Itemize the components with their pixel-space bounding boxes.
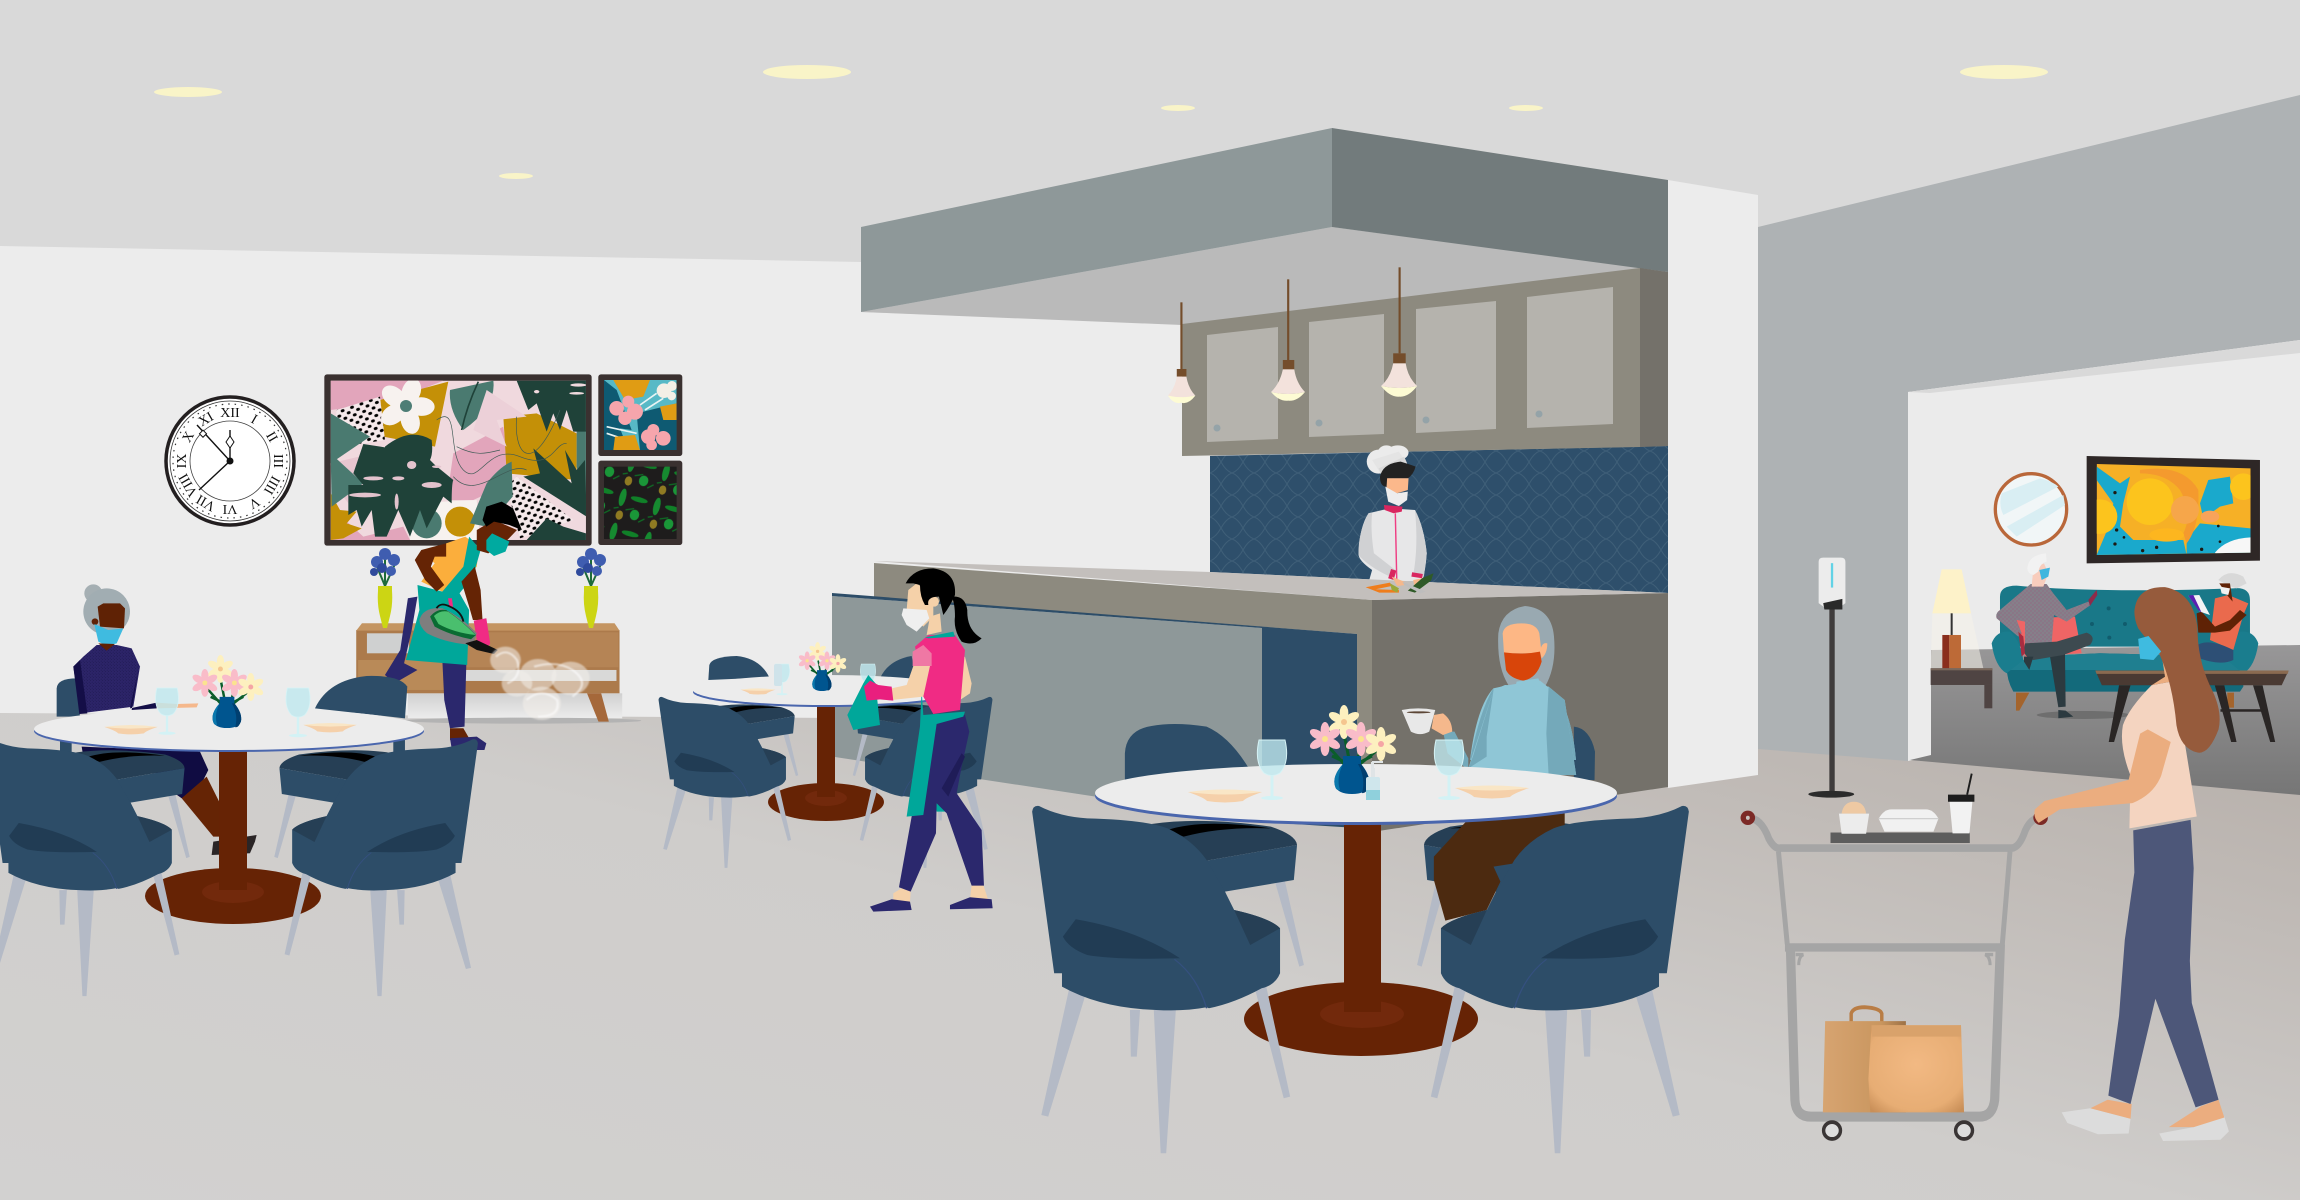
far chair backs	[57, 676, 407, 753]
seated woman reading	[2188, 573, 2248, 663]
sofa	[1992, 586, 2258, 711]
main table seating group	[1032, 606, 1689, 1153]
ceiling lights	[154, 65, 2048, 179]
far chair backs	[708, 656, 917, 680]
lounge floor	[1910, 645, 2300, 795]
service cart	[1741, 774, 2048, 1139]
clock numerals: IX	[175, 454, 190, 468]
left wall	[0, 246, 1210, 760]
clock numerals: XII	[220, 406, 240, 421]
near chair left	[0, 739, 190, 996]
clock numerals: VII	[194, 491, 218, 513]
hand sanitizer stand	[1808, 558, 1854, 798]
right white column	[1668, 180, 1758, 788]
near chair right	[274, 739, 478, 996]
ceiling	[0, 0, 2300, 400]
cleaner with steamer	[385, 502, 590, 750]
seated woman with coffee	[1402, 606, 1576, 921]
seated man	[1996, 553, 2130, 719]
clock numerals: XI	[196, 410, 217, 430]
far chair backs	[1125, 724, 1595, 780]
kitchen cabinets	[1182, 268, 1668, 456]
wall clock	[166, 397, 294, 525]
round table	[34, 708, 424, 924]
sideboard	[356, 623, 641, 724]
chef's chopping board vegetables	[1366, 573, 1434, 593]
clock numerals: II	[262, 429, 280, 445]
cart wheels	[1824, 1122, 1972, 1139]
steam cloud	[490, 647, 590, 720]
lounge coffee table	[2095, 670, 2289, 742]
clock numerals	[175, 406, 285, 516]
small floral painting	[598, 374, 682, 456]
table lamp	[1931, 569, 1983, 668]
clock numerals: V	[246, 493, 262, 511]
clock numerals: VI	[222, 501, 237, 516]
food tray	[1831, 774, 1974, 843]
cart frame	[1748, 818, 2041, 1117]
large tropical painting	[324, 374, 592, 546]
mirror	[1995, 474, 2067, 545]
middle table seating group	[659, 642, 992, 868]
sanitizer bottle	[1366, 762, 1383, 800]
round table	[1095, 764, 1617, 1056]
clock numerals: I	[248, 412, 260, 428]
small leaf painting	[598, 461, 682, 545]
round table	[693, 675, 959, 821]
yellow vases	[370, 548, 606, 628]
seated woman in blue mask	[73, 584, 257, 855]
clock numerals: IIII	[260, 473, 282, 497]
clock numerals: X	[180, 429, 198, 445]
side table	[1931, 668, 1992, 708]
left table seating group	[0, 584, 478, 996]
clock numerals: VIII	[176, 470, 201, 499]
lounge furniture and guests	[1931, 456, 2260, 719]
kitchen counter	[832, 563, 1668, 832]
pendant lights	[1168, 267, 1417, 403]
takeaway bags	[1823, 1007, 1964, 1112]
bulkhead over kitchen	[861, 128, 1668, 325]
clock numerals: III	[270, 454, 285, 468]
floor	[0, 713, 2300, 1200]
near chair right	[1431, 806, 1689, 1153]
counter top	[874, 561, 1668, 600]
near chair left	[1032, 806, 1304, 1153]
waitress wiping table	[847, 568, 993, 912]
lounge room wall	[1908, 340, 2300, 761]
kitchen backsplash	[1210, 446, 1668, 593]
right wall	[1758, 95, 2300, 761]
woman pushing cart	[2034, 587, 2229, 1141]
wall painting	[2083, 456, 2260, 563]
chef	[1359, 445, 1427, 582]
lounge ceiling sliver	[1908, 340, 2300, 393]
cart handles	[1741, 811, 2048, 825]
far side of right chair	[1417, 821, 1569, 967]
wall artwork triptych	[324, 374, 682, 546]
